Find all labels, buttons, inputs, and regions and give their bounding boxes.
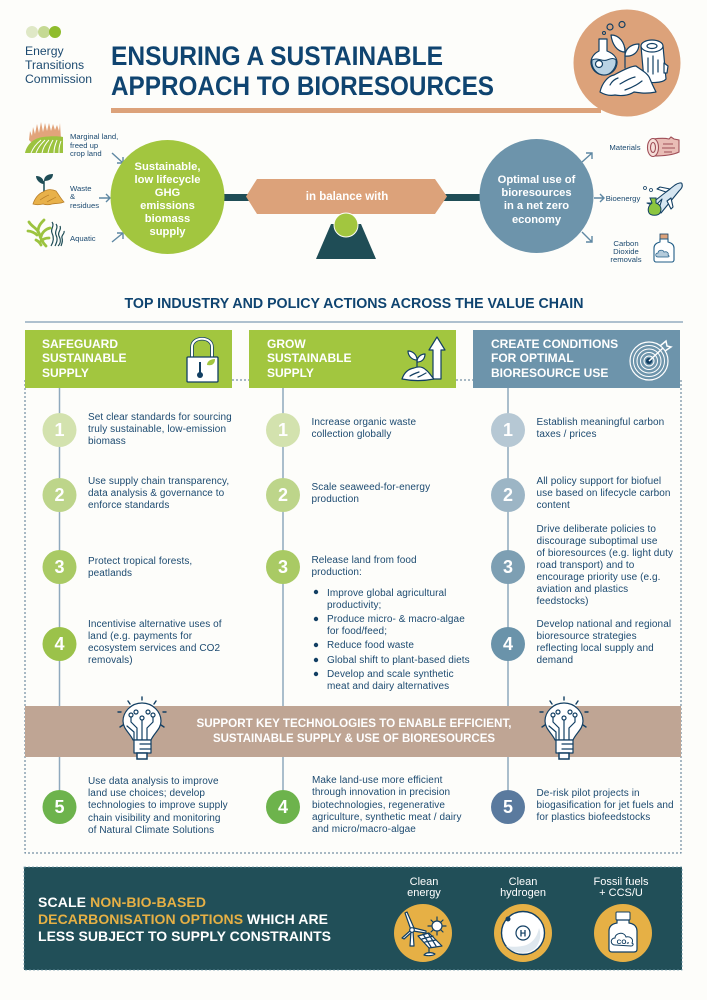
action 2: 2 xyxy=(278,485,288,505)
action 3 xyxy=(266,550,470,692)
column header: create conditions: CREATE CONDITIONS xyxy=(491,337,618,351)
action 3 xyxy=(42,550,192,584)
callout text: SCALE NON-BIO-BASED xyxy=(38,894,206,910)
action 1 xyxy=(266,413,416,447)
technology action: column 2: agriculture, synthetic meat / dairy xyxy=(312,812,462,823)
action 3: 3 xyxy=(503,557,513,577)
icon: carbon removal bottle xyxy=(654,234,674,262)
icon: materials log xyxy=(648,137,679,156)
circle: sustainable supply: Sustainable, xyxy=(135,161,200,173)
panel: scale non-bio-based options: DECARBONISATION OPTIONS WHICH ARE xyxy=(38,911,328,927)
column 3 actions xyxy=(491,413,673,666)
circle: optimal use: Optimal use of xyxy=(498,174,576,186)
action 1: Set clear standards for sourcing xyxy=(88,412,232,423)
hexagon: in balance with xyxy=(246,179,447,214)
technology action: column 3 xyxy=(491,788,674,824)
title: ENSURING A SUSTAINABLE xyxy=(111,41,443,71)
logo: Energy Transitions Commission: Commission xyxy=(25,72,92,86)
column header: safeguard sustainable supply xyxy=(25,330,232,388)
technology action: column 3: biogasification for jet fuels and xyxy=(536,800,674,811)
action 4 xyxy=(42,619,222,666)
action 3: feedstocks) xyxy=(536,596,589,607)
text: use labels: Bioenergy xyxy=(606,194,640,203)
logo: Energy Transitions Commission: Energy xyxy=(25,44,65,58)
action 3: for food/feed; xyxy=(327,626,387,637)
icon: aquatic seaweed xyxy=(28,220,64,246)
action 3: road transport) and to xyxy=(536,560,635,571)
action 2: 2 xyxy=(54,485,65,505)
logo: Energy Transitions Commission xyxy=(25,26,92,86)
action 3: Release land from food xyxy=(312,555,417,566)
action 1: Increase organic waste xyxy=(312,417,416,428)
icon: target xyxy=(630,341,671,380)
action 2 xyxy=(266,478,430,512)
action 3: 3 xyxy=(54,557,65,577)
action 1: biomass xyxy=(88,436,126,447)
text: use labels xyxy=(606,143,642,264)
panel: scale non-bio-based options: LESS SUBJECT TO SUPPLY CONSTRAINTS xyxy=(38,928,331,944)
column header: safeguard sustainable supply: SAFEGUARD xyxy=(42,337,118,351)
circle: sustainable supply: GHG xyxy=(155,187,181,199)
icon: lightbulb right xyxy=(540,697,588,759)
action 4: demand xyxy=(536,655,573,666)
text: use labels: Materials xyxy=(609,143,641,152)
action 1: 1 xyxy=(503,420,513,440)
action 2: 2 xyxy=(503,485,513,505)
icon: bioenergy plane and flask xyxy=(644,183,682,215)
column 2 actions xyxy=(266,413,470,692)
circle: sustainable supply: low lifecycle xyxy=(135,174,200,186)
action 4: 4 xyxy=(54,634,65,654)
action 1 xyxy=(42,412,232,447)
action 2: data analysis & governance to xyxy=(88,488,225,499)
circle: sustainable supply: biomass xyxy=(145,213,190,225)
action 4: 4 xyxy=(503,634,513,654)
action 1: Establish meaningful carbon xyxy=(536,417,664,428)
technology action: column 1: Use data analysis to improve xyxy=(88,776,219,787)
action 4: removals) xyxy=(88,655,133,666)
scale fulcrum xyxy=(316,213,376,259)
technology action: column 3: for plastics biofeedstocks xyxy=(536,812,650,823)
action 3: Global shift to plant-based diets xyxy=(327,655,470,666)
section heading: TOP INDUSTRY AND POLICY ACTIONS ACROSS THE VALUE CHAIN xyxy=(124,296,584,312)
technology action: column 1: technologies to improve supply xyxy=(88,800,228,811)
action 2: production xyxy=(312,494,359,505)
text: source labels: crop land xyxy=(70,149,102,158)
action 1: 1 xyxy=(278,420,288,440)
action 3: meat and dairy alternatives xyxy=(327,681,449,692)
circle: sustainable supply xyxy=(110,140,224,254)
circle: optimal use: economy xyxy=(512,214,562,226)
option labels: + CCS/U xyxy=(599,887,643,899)
action 4: bioresource strategies xyxy=(536,631,637,642)
icon: fossil fuels with carbon capture xyxy=(594,904,652,962)
action 3: Drive deliberate policies to xyxy=(536,524,656,535)
action 3: Improve global agricultural xyxy=(327,588,446,599)
band: support key technologies: SUPPORT KEY TECHNOLOGIES TO ENABLE EFFICIENT, xyxy=(196,716,512,730)
title: APPROACH TO BIORESOURCES xyxy=(111,71,494,101)
option labels: energy xyxy=(407,887,441,899)
text: use labels: removals xyxy=(610,255,642,264)
technology action: column 1: 5 xyxy=(54,797,65,817)
technology action: column 1 xyxy=(42,776,228,836)
technology action: column 1: chain visibility and monitoring xyxy=(88,813,221,824)
column header: grow sustainable supply: SUSTAINABLE xyxy=(267,351,351,365)
column header: safeguard sustainable supply: SUPPLY xyxy=(42,366,89,380)
action 2: use based on lifecycle carbon xyxy=(536,488,671,499)
option labels xyxy=(407,876,649,899)
column header: grow sustainable supply xyxy=(249,330,456,388)
text: use labels: Carbon xyxy=(613,239,639,248)
right outputs: bioresource uses xyxy=(582,137,682,264)
action 2 xyxy=(42,476,229,512)
action 3: Develop and scale synthetic xyxy=(327,669,454,680)
action 1 xyxy=(491,413,664,447)
text: source labels xyxy=(70,132,118,243)
column header: create conditions: BIORESOURCE USE xyxy=(491,366,608,380)
text: source labels: Aquatic xyxy=(70,234,96,243)
technology action: column 3: 5 xyxy=(503,797,513,817)
circle: optimal use xyxy=(480,139,594,253)
balance connector bars xyxy=(224,194,480,201)
arrows out of optimal use xyxy=(582,153,604,242)
action 4: ecosystem services and CO2 xyxy=(88,643,220,654)
icon: bioresources badge xyxy=(574,10,680,116)
timeline lines xyxy=(60,388,508,790)
action 2: Scale seaweed-for-energy xyxy=(312,482,430,493)
technology action: column 1: land use choices; develop xyxy=(88,788,205,799)
option labels: Clean xyxy=(410,876,438,888)
technology action: column 2 xyxy=(266,775,462,835)
action 2 xyxy=(491,476,671,512)
technology action: column 3: De-risk pilot projects in xyxy=(536,788,640,799)
title underline xyxy=(111,108,601,113)
action 3: 3 xyxy=(278,557,288,577)
option labels: Clean xyxy=(509,876,537,888)
action 3: Produce micro- & macro-algae xyxy=(327,614,465,625)
text: use labels: Dioxide xyxy=(613,247,639,256)
option labels: hydrogen xyxy=(500,887,546,899)
action 3: peatlands xyxy=(88,568,132,579)
action 3: encourage priority use (e.g. xyxy=(536,572,660,583)
technology action: column 2: biotechnologies, regenerative xyxy=(312,800,445,811)
option labels: Fossil fuels xyxy=(593,876,649,888)
column header: create conditions: FOR OPTIMAL xyxy=(491,351,574,365)
column header: grow sustainable supply: GROW xyxy=(267,337,306,351)
technology action: column 2: 4 xyxy=(278,797,288,817)
action 2: enforce standards xyxy=(88,500,169,511)
action 4: reflecting local supply and xyxy=(536,643,654,654)
action 1: collection globally xyxy=(312,429,391,440)
hexagon: in balance with: in balance with xyxy=(306,191,388,203)
action 2: All policy support for biofuel xyxy=(536,476,661,487)
action 4: Incentivise alternative uses of xyxy=(88,619,222,630)
action 3: aviation and plastics xyxy=(536,584,628,595)
left inputs: bioresource sources xyxy=(25,122,123,246)
circle: optimal use: in a net zero xyxy=(504,200,569,212)
technology action: column 2: through innovation in precision xyxy=(312,787,450,798)
icon: growth arrow xyxy=(402,337,445,380)
technology action: column 2: and micro/macro-algae xyxy=(312,824,416,835)
logo: Energy Transitions Commission: Transitions xyxy=(25,58,84,72)
icon: lightbulb left xyxy=(118,697,166,759)
text: source labels: freed up xyxy=(70,141,98,150)
action 3: Reduce food waste xyxy=(327,640,414,651)
action 1: 1 xyxy=(54,420,65,440)
circle: sustainable supply: emissions xyxy=(140,200,195,212)
icon: marginal land xyxy=(25,122,63,153)
title xyxy=(111,41,494,101)
icon: clean energy xyxy=(394,904,452,962)
action 2: Use supply chain transparency, xyxy=(88,476,229,487)
action 3: of bioresources (e.g. light duty xyxy=(536,548,673,559)
action 3: production: xyxy=(312,567,362,578)
action 2: content xyxy=(536,500,570,511)
action 4 xyxy=(491,619,671,666)
band: support key technologies xyxy=(25,706,681,757)
text: source labels: Waste xyxy=(70,184,92,193)
action 4: Develop national and regional xyxy=(536,619,671,630)
action 1: taxes / prices xyxy=(536,429,597,440)
text: source labels: residues xyxy=(70,201,99,210)
icon: waste and residues xyxy=(33,174,64,205)
circle: sustainable supply: supply xyxy=(149,226,186,238)
technology action: column 1: of Natural Climate Solutions xyxy=(88,825,214,836)
icon: clean hydrogen: H xyxy=(520,928,526,938)
action 3: discourage suboptimal use xyxy=(536,536,658,547)
technology action: column 2: Make land-use more efficient xyxy=(312,775,443,786)
column header: grow sustainable supply: SUPPLY xyxy=(267,366,314,380)
action 1: truly sustainable, low-emission xyxy=(88,424,226,435)
column header: create conditions xyxy=(473,330,680,388)
action 4: land (e.g. payments for xyxy=(88,631,193,642)
text: source labels: Marginal land, xyxy=(70,132,118,141)
panel: scale non-bio-based options xyxy=(24,867,682,970)
action 3 xyxy=(491,524,673,607)
icon: clean hydrogen xyxy=(494,904,552,962)
column header: safeguard sustainable supply: SUSTAINABLE xyxy=(42,351,126,365)
action 3: Protect tropical forests, xyxy=(88,556,192,567)
icon: fossil fuels with carbon capture: CO₂ xyxy=(617,939,629,946)
icon: padlock xyxy=(187,339,218,382)
band: support key technologies: SUSTAINABLE SUPPLY & USE OF BIORESOURCES xyxy=(213,731,495,745)
action 3: productivity; xyxy=(327,600,381,611)
column 1 actions xyxy=(42,412,232,666)
arrows into supply xyxy=(99,153,123,242)
circle: optimal use: bioresources xyxy=(501,187,572,199)
text: source labels: & xyxy=(70,192,75,201)
